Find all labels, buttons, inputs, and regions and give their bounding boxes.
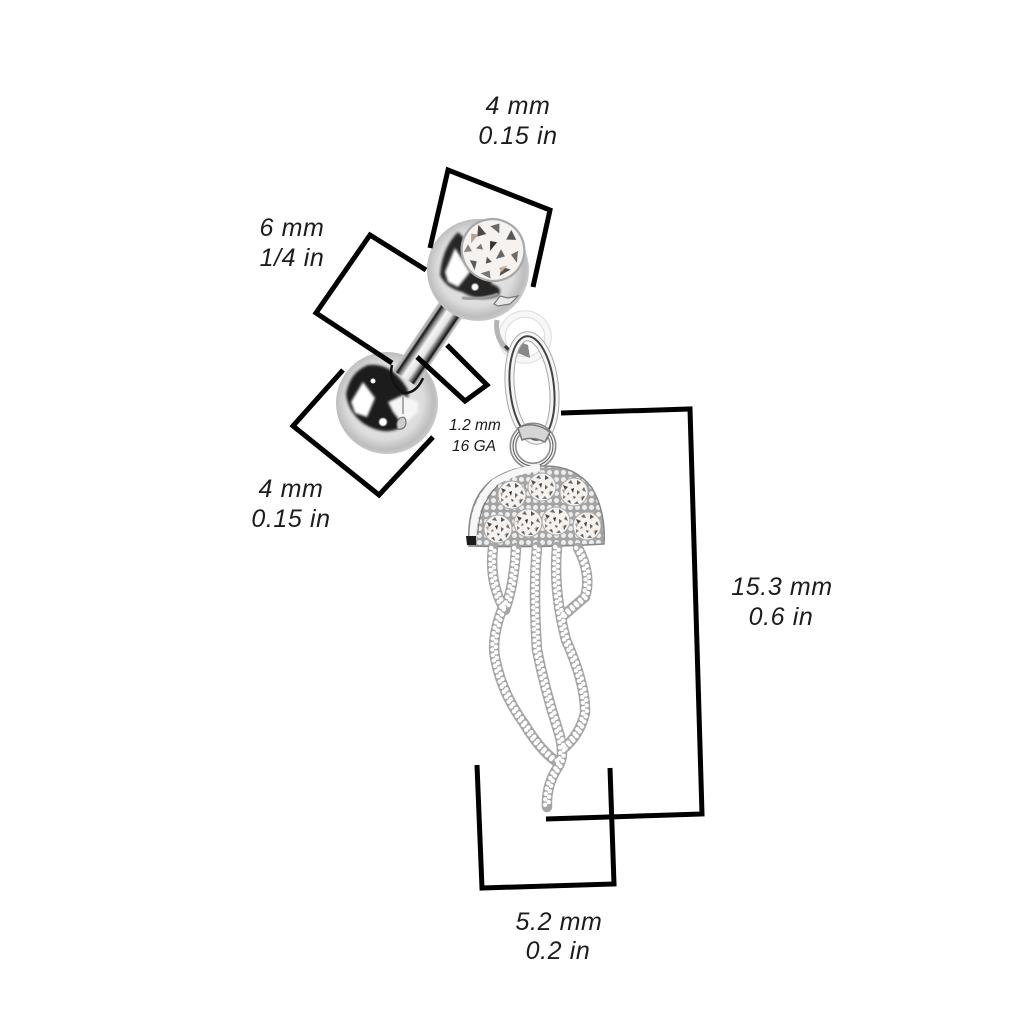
dimension bracket: width 5.2 mm bbox=[477, 765, 614, 888]
rings bbox=[497, 314, 559, 466]
jewel bbox=[451, 208, 535, 292]
label: top ball size: 4 mm bbox=[486, 92, 550, 120]
top ball bbox=[427, 208, 535, 321]
bell bbox=[466, 466, 604, 547]
label: top ball size: 0.15 in bbox=[478, 122, 558, 150]
label: gauge: 16 GA bbox=[452, 438, 496, 455]
label: bar length: 6 mm bbox=[260, 214, 324, 242]
tentacles bbox=[490, 547, 589, 807]
label: gauge: 1.2 mm bbox=[449, 417, 501, 434]
dimension bracket: bar length 6 mm bbox=[316, 235, 487, 401]
barbell bbox=[336, 208, 535, 454]
label: pendant width: 5.2 mm bbox=[516, 908, 602, 936]
jellyfish pendant bbox=[466, 466, 604, 807]
bottom ball bbox=[336, 352, 438, 454]
label: pendant length: 0.6 in bbox=[749, 603, 813, 631]
dimension bracket: length 15.3 mm bbox=[546, 409, 702, 819]
label: pendant width: 0.2 in bbox=[526, 937, 590, 965]
dimension bracket: top ball 4 mm bbox=[430, 170, 550, 287]
long oval ring bbox=[505, 334, 559, 442]
small connector ring bbox=[497, 314, 548, 360]
label: bar length: 1/4 in bbox=[260, 244, 324, 272]
bar bbox=[393, 302, 462, 386]
jump ring bbox=[513, 426, 553, 466]
label: bottom ball size: 0.15 in bbox=[251, 505, 331, 533]
label: bottom ball size: 4 mm bbox=[259, 475, 323, 503]
dimension bracket: bottom ball 4 mm bbox=[293, 370, 433, 495]
label: pendant length: 15.3 mm bbox=[731, 573, 833, 601]
